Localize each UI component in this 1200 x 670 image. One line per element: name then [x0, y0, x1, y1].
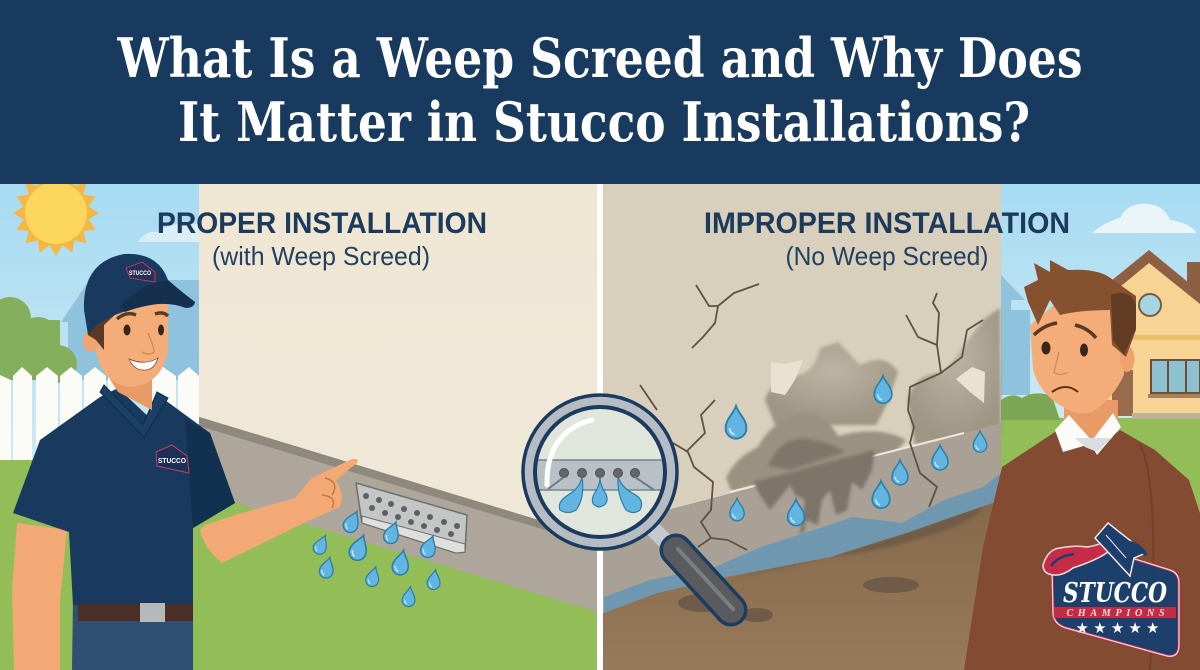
- cloud: [138, 224, 199, 242]
- nose: [142, 333, 154, 354]
- title banner: It Matter in Stucco Installations?: [178, 90, 1030, 154]
- stars: ★★★★★: [1076, 619, 1160, 637]
- subheading: (with Weep Screed): [212, 241, 430, 271]
- soil: [603, 500, 1001, 670]
- badge: [1052, 548, 1179, 656]
- lens: [530, 400, 670, 545]
- polo shirt: [13, 388, 235, 605]
- swoosh: [1043, 540, 1108, 575]
- hair: [88, 315, 114, 350]
- pointing arm: [200, 459, 358, 563]
- water drops from screed: [311, 508, 442, 607]
- sky and yard: [0, 184, 600, 670]
- inner ring: [535, 407, 665, 537]
- magnifying glass: [523, 395, 733, 610]
- shirt logo: [156, 445, 189, 473]
- house: [1107, 250, 1200, 419]
- eyebrows: [1034, 323, 1096, 338]
- heading: improper installation: IMPROPER INSTALLATION: [704, 207, 1070, 240]
- wet soil stain: [678, 505, 985, 622]
- beige wall: [199, 184, 598, 538]
- cap: STUCCO: [129, 271, 151, 277]
- belt: [78, 604, 193, 621]
- rim: [523, 395, 677, 549]
- ear: [83, 330, 99, 352]
- hair: [1024, 260, 1136, 357]
- water line: [604, 473, 1001, 613]
- trowel: [1095, 523, 1146, 576]
- smile: [129, 358, 158, 370]
- heading: proper installation: PROPER INSTALLATION: [157, 207, 487, 240]
- eyes: [1042, 342, 1050, 354]
- frown: [1052, 387, 1078, 392]
- weep screed strip: [356, 483, 467, 553]
- neck: [1064, 400, 1118, 450]
- sweater: [964, 430, 1200, 670]
- stucco damage patches: [726, 308, 1001, 492]
- handle: [650, 526, 733, 610]
- ear: [1120, 346, 1134, 372]
- cloud: [1092, 204, 1197, 233]
- shirt logo: STUCCO: [158, 458, 187, 465]
- panel: proper installation: [0, 170, 600, 670]
- cap: [84, 254, 195, 335]
- head: [96, 304, 168, 387]
- damp drip stains: [753, 450, 875, 533]
- foundation: [199, 417, 598, 612]
- trousers: [72, 600, 193, 670]
- head: [1030, 300, 1124, 413]
- damp foundation: [603, 423, 1001, 620]
- neck: [108, 378, 152, 410]
- water drops in wall: [726, 376, 987, 526]
- red band: [1054, 607, 1176, 618]
- cracks: [640, 284, 983, 550]
- eyes: [124, 324, 130, 336]
- seam highlight: [730, 433, 964, 492]
- picket fence: [0, 367, 199, 460]
- subheading: (No Weep Screed): [786, 241, 988, 271]
- center divider: [597, 184, 603, 670]
- collar: [1055, 413, 1121, 455]
- buckle: [140, 603, 165, 622]
- sky and yard: [1001, 184, 1200, 513]
- logo: stucco champions: [1043, 523, 1179, 656]
- brand name: STUCCO: [1063, 578, 1167, 609]
- left arm: [12, 523, 67, 670]
- homeowner: [964, 260, 1200, 670]
- tagline: CHAMPIONS: [1066, 608, 1165, 619]
- icon: sun: [13, 184, 99, 256]
- eyebrows: [117, 313, 168, 319]
- title banner: [0, 0, 1200, 184]
- nose: [1054, 352, 1068, 374]
- panel: improper installation: [603, 184, 1200, 670]
- peeled plaster: [771, 360, 985, 403]
- worker: [12, 254, 358, 670]
- damaged wall: [603, 184, 1001, 527]
